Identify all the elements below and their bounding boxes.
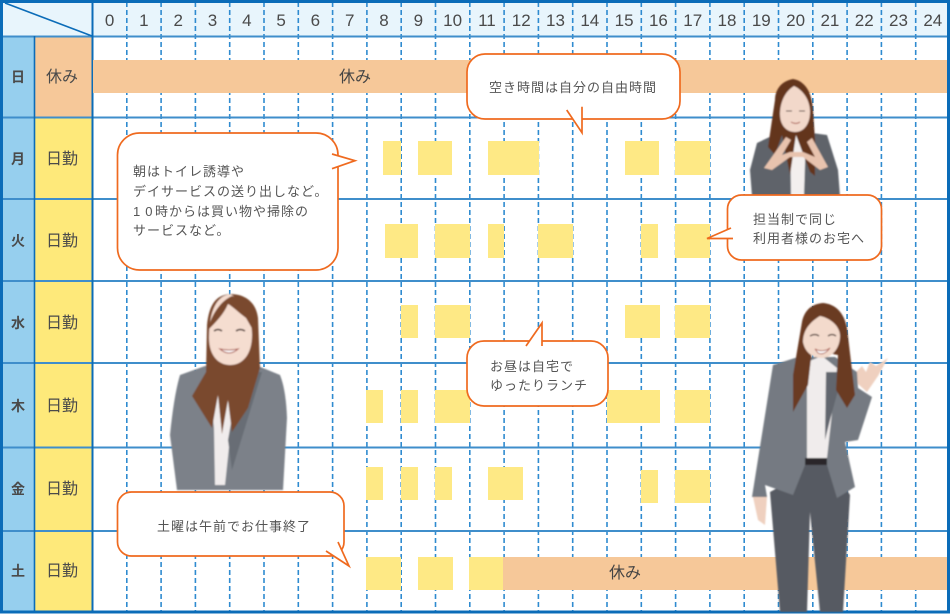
day labels: 火 (11, 233, 25, 249)
callout: free time (467, 54, 680, 133)
callout: morning tasks: サービスなど。 (133, 223, 230, 238)
hour labels: 7 (345, 11, 354, 30)
callout: morning tasks: 時からは買い物や掃除の (155, 204, 309, 219)
photo: woman in suit, seated front (170, 294, 287, 490)
day labels: 土 (11, 563, 25, 579)
hour labels: 17 (683, 11, 702, 30)
Friday work blocks (366, 467, 710, 503)
hour labels: 15 (615, 11, 634, 30)
day labels: 水 (11, 315, 25, 331)
callout: lunch at home: ゆったりランチ (490, 378, 588, 393)
callout: free time: 空き時間は自分の自由時間 (489, 80, 657, 95)
callout: Saturday morning only: 土曜は午前でお仕事終了 (157, 519, 311, 534)
callout: morning tasks: 10 (133, 204, 153, 219)
day labels: 木 (11, 398, 25, 414)
hour labels: 9 (414, 11, 423, 30)
shift labels: 日勤 (46, 397, 78, 415)
hour labels: 2 (173, 11, 183, 30)
header background (2, 2, 948, 36)
Saturday work blocks (366, 557, 503, 590)
hour labels: 21 (820, 11, 839, 30)
Thursday work blocks (366, 390, 710, 423)
day labels: 金 (11, 481, 25, 497)
hour labels: 14 (580, 11, 599, 30)
hour labels: 13 (546, 11, 565, 30)
hour labels: 24 (923, 11, 942, 30)
hour labels: 12 (512, 11, 531, 30)
Saturday day-off bar: 休み (609, 564, 641, 582)
callout: morning tasks: 朝はトイレ誘導や (133, 164, 245, 179)
callout: same client (707, 195, 882, 260)
hour labels: 23 (889, 11, 908, 30)
callout: morning tasks (118, 133, 355, 270)
hour labels: 19 (752, 11, 771, 30)
hour labels: 22 (855, 11, 874, 30)
hour labels (105, 11, 942, 30)
hour labels: 20 (786, 11, 805, 30)
hour labels: 1 (139, 11, 149, 30)
day labels: 日 (11, 69, 25, 85)
hour labels: 3 (208, 11, 217, 30)
day labels: 月 (11, 151, 25, 167)
Sunday day-off bar: 休み (339, 68, 371, 86)
callout: morning tasks: デイサービスの送り出しなど。 (133, 184, 328, 199)
Monday work blocks (383, 141, 710, 175)
Saturday day-off bar (503, 557, 947, 590)
shift labels: 日勤 (46, 150, 78, 168)
hour labels: 10 (443, 11, 462, 30)
callout: Saturday morning only (118, 492, 349, 566)
shift labels (46, 68, 78, 580)
shift labels: 日勤 (46, 232, 78, 250)
photo: woman in suit, hands forming shape (750, 79, 840, 196)
hour labels: 18 (718, 11, 736, 30)
hour labels: 0 (105, 11, 114, 30)
Wednesday work blocks (401, 305, 710, 338)
hour labels: 11 (478, 11, 496, 30)
hour labels: 5 (276, 11, 286, 30)
callout: same client: 利用者様のお宅へ (753, 231, 865, 246)
hour labels: 6 (311, 11, 320, 30)
shift labels: 日勤 (46, 562, 78, 580)
photo: woman in suit, waving (752, 303, 888, 612)
hour labels: 8 (379, 11, 389, 30)
callout: same client: 担当制で同じ (753, 212, 837, 227)
Sunday day-off bar (93, 60, 947, 93)
Tuesday work blocks (385, 224, 710, 258)
hour labels: 16 (649, 11, 668, 30)
callout: lunch at home: お昼は自宅で (490, 359, 574, 374)
shift labels: 休み (46, 68, 78, 86)
shift labels: 日勤 (46, 480, 78, 498)
hour labels: 4 (242, 11, 252, 30)
day column background (2, 36, 92, 612)
callout: lunch at home (467, 323, 608, 406)
shift labels: 日勤 (46, 314, 78, 332)
day labels (11, 69, 25, 579)
